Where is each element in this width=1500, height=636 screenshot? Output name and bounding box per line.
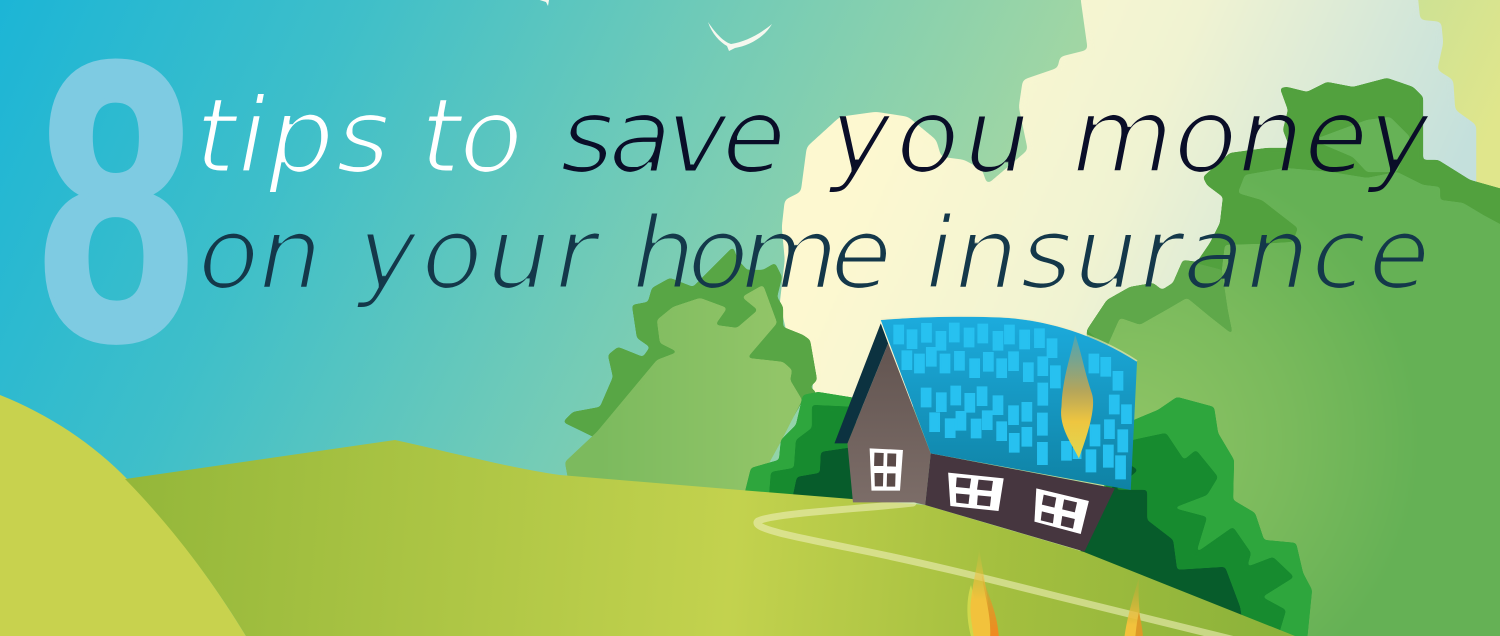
save you money: you	[827, 75, 1030, 197]
side window	[870, 448, 903, 491]
heading line 2	[198, 195, 1430, 312]
heading line 2: home	[632, 195, 892, 312]
lower crown band	[1087, 260, 1233, 350]
winding path	[757, 503, 1235, 636]
roof shingles	[894, 323, 1131, 479]
upper light patch	[1313, 117, 1410, 172]
heading line 2: your	[355, 195, 602, 312]
roof top highlight	[881, 316, 1137, 361]
bird large	[708, 22, 772, 51]
right bush behind house	[1080, 397, 1312, 636]
back trees right	[1085, 78, 1500, 636]
tips to: to	[420, 75, 523, 197]
front window left	[948, 473, 1004, 511]
save you money: save	[560, 75, 786, 197]
heading line 1	[195, 75, 1431, 197]
gable wall	[847, 343, 931, 505]
save you money	[560, 75, 1431, 197]
dark tree crown	[1085, 78, 1500, 520]
foreground hill	[125, 440, 1295, 636]
front window right	[1034, 488, 1089, 534]
left bush behind house	[742, 392, 860, 510]
clouds	[780, 0, 1476, 410]
house	[834, 316, 1137, 552]
far left hill	[0, 395, 246, 636]
save you money: money	[1072, 75, 1431, 197]
light crown	[565, 285, 802, 510]
dark gable fascia	[834, 323, 888, 443]
light hill body	[1100, 168, 1500, 636]
tips to	[195, 75, 523, 197]
front wall	[925, 453, 1115, 552]
bird top	[527, 0, 549, 6]
heading line 2: on	[198, 195, 322, 312]
heading line 2: insurance	[925, 195, 1430, 312]
roof flame	[1061, 335, 1093, 458]
dark crown	[563, 247, 817, 440]
tips to: tips	[195, 75, 390, 197]
flame bottom right	[1124, 573, 1143, 636]
roof	[881, 317, 1137, 490]
flame bottom left	[967, 548, 999, 636]
back tree left	[563, 247, 817, 510]
